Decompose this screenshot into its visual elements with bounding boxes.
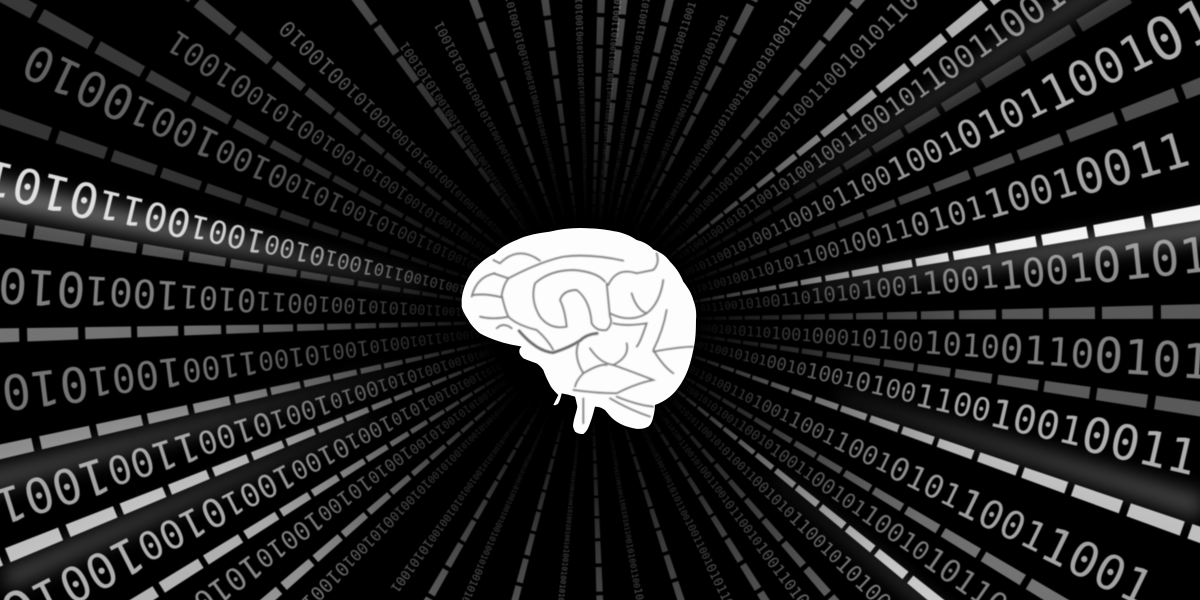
binary digit rows: 011010010011010110010011010110010011 (678, 122, 1196, 319)
binary digit rows: 010111001010011010101001100110010101 (687, 227, 1200, 337)
binary digit rows: 100101001010100101001010100100101010010010101001 (387, 396, 537, 594)
binary digit rows: 100101001010100101001010100100101010010010101001 (397, 38, 541, 241)
binary digit rows: 100101001001010010100100101001010010010100101001010010100101 (504, 0, 572, 224)
binary digit rows: 100101001001010100101001010011001001 (0, 323, 503, 534)
binary digit rows: 100101100101001100101100100110010110010100110010110010011001 (626, 13, 732, 231)
binary digit rows: 100110010101001010010100110010010011 (681, 315, 1200, 487)
binary digit rows: 100101001010100101001010100100101010010010101001 (432, 18, 552, 234)
binary digit rows: 100100100101100101001010010010010010 (15, 32, 511, 303)
binary digit rows: 100101001010010010100100101001001010010010 (275, 14, 527, 260)
lateral sulcus shadow (518, 330, 598, 353)
binary digit rows: 110001010110100100010100101001100101 (688, 299, 1200, 391)
icon: white brain (462, 228, 696, 434)
binary digit rows: 0100101010011001010010010100100101001001 (161, 22, 517, 279)
binary digit rows: 100101100101001100101100100110010110010100110010110010011001 (616, 1, 699, 227)
